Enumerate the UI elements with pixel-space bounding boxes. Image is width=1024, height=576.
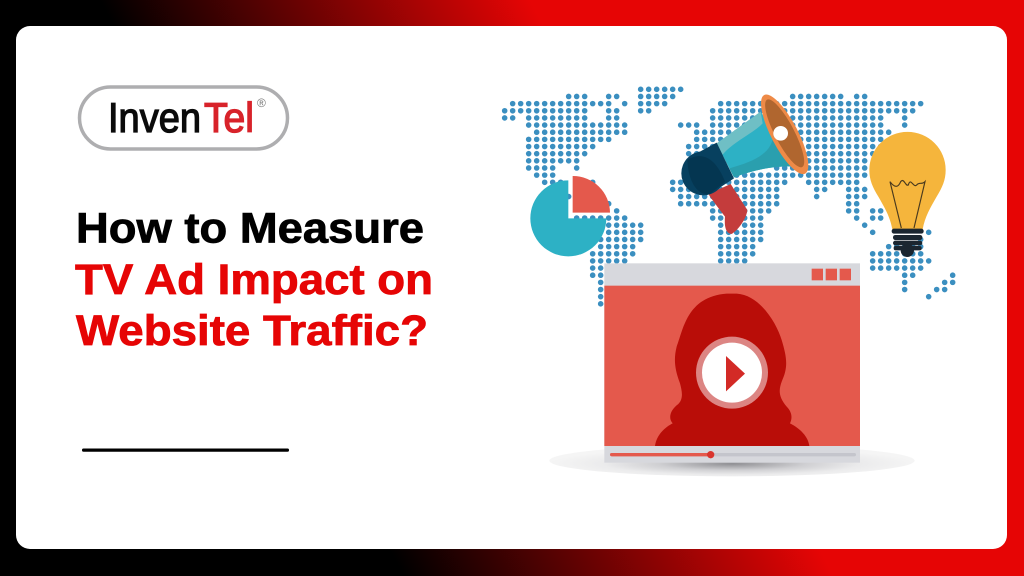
video player [549, 263, 915, 476]
player shadow [549, 445, 915, 476]
megaphone handle [708, 184, 747, 234]
pie chart icon [530, 176, 610, 256]
play button [696, 337, 768, 409]
player window [604, 263, 860, 463]
title [75, 205, 433, 355]
title: How to Measure [76, 205, 424, 253]
title: TV Ad Impact on [75, 256, 433, 304]
title: Website Traffic? [76, 307, 428, 355]
megaphone body [681, 143, 734, 195]
megaphone rim [752, 89, 817, 180]
icon: megaphone [681, 89, 817, 234]
divider line [82, 448, 289, 452]
video area [604, 286, 860, 446]
window buttons [812, 269, 851, 280]
logo: InvenTel: Tel [204, 94, 254, 141]
logo: InvenTel: ® [257, 96, 266, 110]
logo: InvenTel: Inven [108, 94, 201, 141]
progress bar [610, 451, 856, 458]
silhouette [655, 294, 809, 446]
logo: InvenTel [80, 87, 288, 149]
megaphone bell [717, 112, 795, 177]
icon: light bulb [869, 132, 946, 257]
dotted world map [505, 89, 953, 304]
